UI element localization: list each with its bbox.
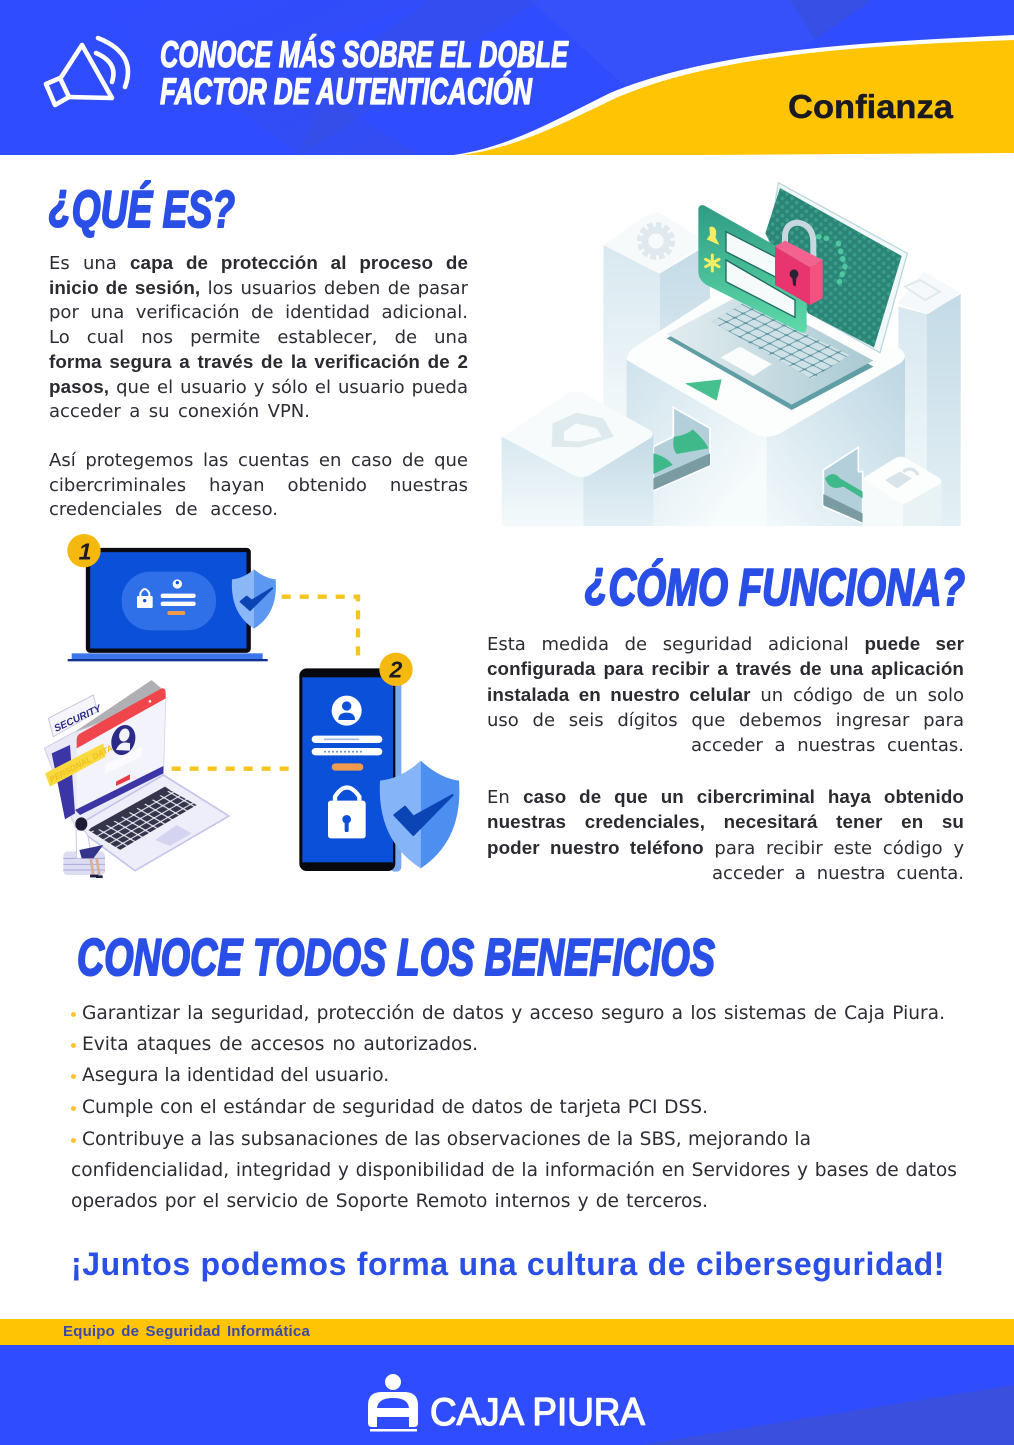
laptop: step 1 xyxy=(68,550,268,661)
list: beneficios: Garantizar la seguridad, protección de datos y acceso seguro a los sistemas de Caja Piura. xyxy=(82,1003,945,1024)
title xyxy=(160,34,569,112)
illustration: two-step verification flow xyxy=(44,534,460,878)
text block: qué es xyxy=(49,252,468,520)
footer: yellow strip xyxy=(0,1319,1014,1345)
front-left cube xyxy=(502,391,653,526)
text block: qué es: Es una capa de protección al proceso de xyxy=(49,252,468,274)
laptop base xyxy=(667,292,873,410)
list: beneficios: Cumple con el estándar de seguridad de datos de tarjeta PCI DSS. xyxy=(82,1097,708,1118)
footer: blue band with logo xyxy=(0,1345,1014,1445)
list: beneficios: Asegura la identidad del usuario. xyxy=(82,1065,389,1086)
closing message: ¡Juntos podemos forma una cultura de ciberseguridad! xyxy=(71,1246,945,1282)
icon: megaphone xyxy=(46,38,128,105)
text block: qué es: Así protegemos las cuentas en caso de que xyxy=(49,450,468,471)
laptop screen xyxy=(762,183,907,353)
text block: cómo funciona xyxy=(487,633,964,884)
logo: Caja Piura xyxy=(368,1374,645,1434)
footer team label: Equipo de Seguridad Informática xyxy=(63,1323,310,1340)
list: beneficios xyxy=(71,1003,957,1212)
text block: cómo funciona: uso de seis dígitos que debemos ingresar para xyxy=(487,710,964,731)
back-right column xyxy=(897,272,961,526)
woman sitting on books xyxy=(63,817,105,877)
padlock xyxy=(775,223,823,305)
list: beneficios: Evita ataques de accesos no autorizados. xyxy=(82,1034,478,1055)
text block: qué es: acceder a su conexión VPN. xyxy=(49,401,310,422)
illustration: laptop with lock on isometric blocks xyxy=(502,182,961,526)
text block: qué es: forma segura a través de la verificación de 2 xyxy=(49,351,468,372)
text block: qué es: pasos, que el usuario y sólo el usuario pueda xyxy=(49,376,468,398)
list: beneficios: operados por el servicio de Soporte Remoto internos y de terceros. xyxy=(71,1191,708,1212)
dashed connectors xyxy=(172,597,358,769)
title: FACTOR DE AUTENTICACIÓN xyxy=(160,71,533,112)
window: shields on conveyor xyxy=(653,407,710,491)
isometric laptop with security tags: SECURITY xyxy=(53,703,104,735)
isometric laptop with security tags: PERSONAL DATA xyxy=(48,743,114,784)
text block: qué es: Lo cual nos permite establecer, de una xyxy=(49,327,468,348)
window: key xyxy=(823,447,863,523)
text block: cómo funciona: En caso de que un cibercriminal haya obtenido xyxy=(487,786,964,808)
text block: cómo funciona: Esta medida de seguridad adicional puede ser xyxy=(487,633,964,655)
badge: 2 xyxy=(379,653,413,686)
title: CONOCE MÁS SOBRE EL DOBLE xyxy=(160,34,569,75)
list: beneficios: confidencialidad, integridad y disponibilidad de la información en Servidores y bases de datos xyxy=(71,1160,957,1181)
phone: step 2 xyxy=(299,668,401,872)
list: beneficios: Contribuye a las subsanaciones de las observaciones de la SBS, mejorando la xyxy=(82,1129,811,1150)
badge: 2: 2 xyxy=(388,657,402,683)
text block: cómo funciona: poder nuestro teléfono para recibir este código y xyxy=(487,837,964,859)
icon: shield large xyxy=(380,761,459,868)
badge: 1 xyxy=(67,534,101,567)
text block: qué es: inicio de sesión, los usuarios deben de pasar xyxy=(49,277,468,299)
icon: green arrow xyxy=(685,379,722,401)
label: Confianza: Confianza xyxy=(788,88,954,125)
badge: 1: 1 xyxy=(79,538,92,564)
text block: cómo funciona: nuestras credenciales, necesitará tener en su xyxy=(487,811,964,832)
text block: qué es: cibercriminales hayan obtenido nuestras xyxy=(49,475,468,496)
yellow wave xyxy=(445,35,1014,156)
text block: cómo funciona: acceder a nuestras cuentas. xyxy=(691,735,964,756)
isometric laptop with security tags xyxy=(44,680,229,871)
header banner xyxy=(0,0,1014,155)
central block xyxy=(627,298,905,526)
text block: cómo funciona: configurada para recibir a través de una aplicación xyxy=(487,658,964,679)
back-left column xyxy=(603,212,710,437)
text block: cómo funciona: instalada en nuestro celular un código de un solo xyxy=(487,684,964,706)
login card xyxy=(698,205,807,333)
text block: cómo funciona: acceder a nuestra cuenta. xyxy=(712,863,964,884)
text block: qué es: por una verificación de identidad adicional. xyxy=(49,302,468,323)
front-right cube xyxy=(863,457,942,526)
logo: Caja Piura: CAJA PIURA xyxy=(430,1391,645,1434)
icon: shield small xyxy=(232,569,276,629)
text block: qué es: credenciales de acceso. xyxy=(49,499,278,520)
